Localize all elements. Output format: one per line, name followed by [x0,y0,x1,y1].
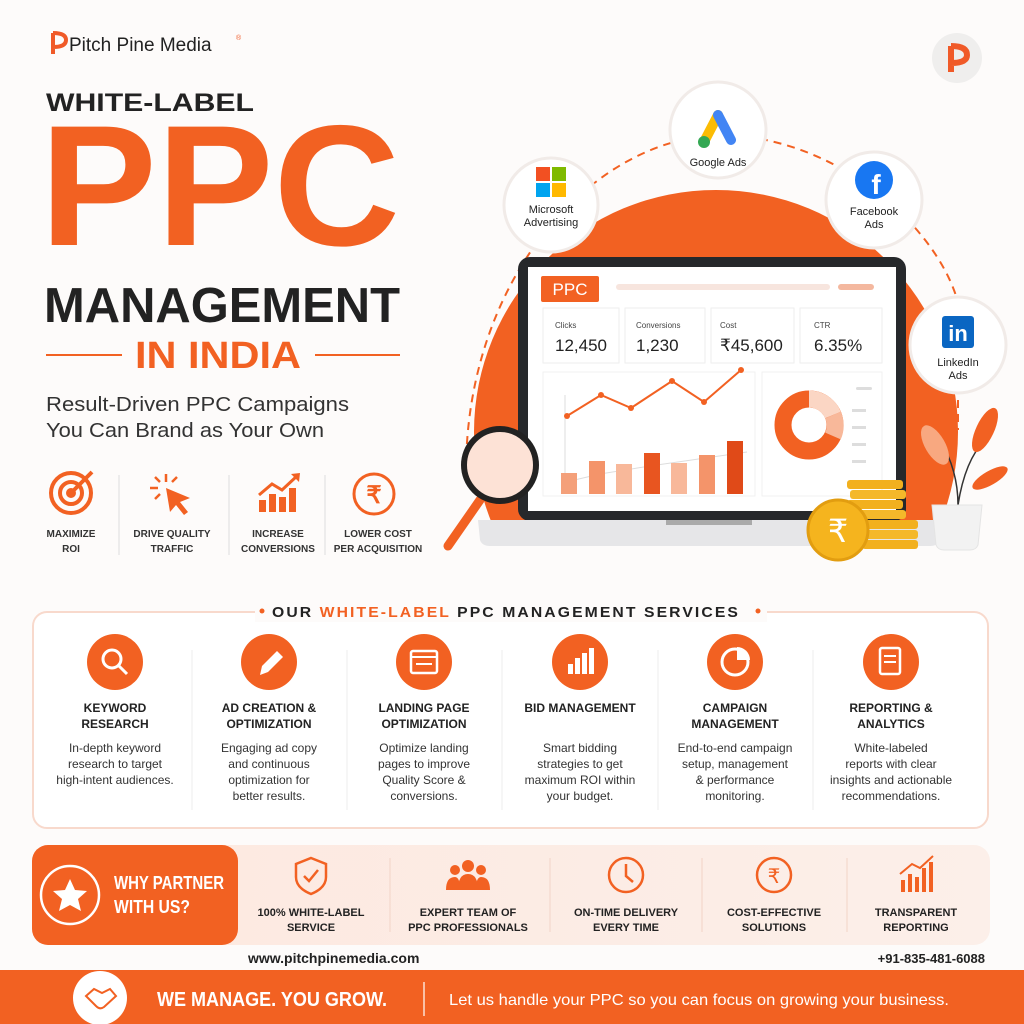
service: ad creation [221,634,317,803]
orange circle background [474,190,958,520]
benefit: transparent reporting: REPORTING [883,922,949,934]
benefits row: MAXIMIZE [47,529,96,540]
service: ad creation: better results. [233,789,305,803]
hero illustration [444,80,1008,562]
title: IN INDIA [135,335,301,377]
service: campaign management: & performance [696,773,775,787]
service: landing page: OPTIMIZATION [381,717,467,731]
benefits row: DRIVE QUALITY [133,529,211,540]
icon: rupee coins [808,480,918,560]
icon: rupee coins: ₹ [828,513,848,549]
icon: growth bars [259,473,300,512]
service: bid management: your budget. [547,789,613,803]
panel: why partner [32,845,990,945]
stat cards: Cost [720,321,737,330]
icon: Microsoft Advertising: Microsoft [529,204,573,216]
service: campaign management: End-to-end campaign [678,741,792,755]
service: reporting: White-labeled [854,741,928,755]
contact info: www.pitchpinemedia.com [247,950,419,966]
benefits row: PER ACQUISITION [334,544,422,555]
laptop: PPC [553,280,587,299]
service: bid management: Smart bidding [543,741,617,755]
footer bar: WE MANAGE. YOU GROW. [157,989,387,1011]
icon: Facebook Ads: Ads [865,219,884,231]
title: MANAGEMENT [44,279,400,333]
service: ad creation: OPTIMIZATION [226,717,312,731]
service: landing page: Quality Score & [382,773,466,787]
benefit: white-label service: 100% WHITE-LABEL [258,907,365,919]
benefit: white-label service [258,858,365,934]
benefit: transparent reporting: TRANSPARENT [875,907,957,919]
benefits row: TRAFFIC [151,544,193,555]
icon: Microsoft Advertising [504,158,598,252]
logo: ® [236,34,242,42]
benefit: expert team [408,860,528,934]
donut chart [762,372,882,496]
icon: top-right brand mark [932,33,982,83]
benefit: cost-effective [727,858,821,934]
service: reporting: REPORTING & [849,701,933,715]
icon: LinkedIn Ads: in [948,321,968,346]
service: ad creation: Engaging ad copy [221,741,317,755]
service: landing page: Optimize landing [379,741,469,755]
why partner badge [32,845,238,945]
service: landing page [378,634,470,803]
benefit: on-time: ON-TIME DELIVERY [574,907,679,919]
icon: magnifier [448,429,536,546]
icon: rupee: ₹ [366,482,382,509]
benefit: on-time [574,858,679,934]
service: campaign management: setup, management [682,757,789,771]
logo [53,33,242,56]
service: landing page: pages to improve [378,757,470,771]
benefit: cost-effective: COST-EFFECTIVE [727,907,821,919]
service: reporting: reports with clear [845,757,937,771]
service: ad creation: and continuous [228,757,310,771]
benefits row: CONVERSIONS [241,544,315,555]
icon: Facebook Ads [826,152,922,248]
benefits row [47,472,422,555]
icon: Microsoft Advertising: Advertising [524,217,578,229]
subtitle: You Can Brand as Your Own [46,420,324,442]
title: PPC [40,90,400,282]
service: landing page: conversions. [390,789,458,803]
service: ad creation: AD CREATION & [222,701,317,715]
stat cards [543,308,882,363]
service: keyword research: research to target [68,757,163,771]
dashed orbit [466,135,962,472]
stat cards: Conversions [636,321,680,330]
service: reporting: insights and actionable [830,773,952,787]
benefits row: LOWER COST [344,529,412,540]
benefit: transparent reporting [875,856,957,934]
benefit: cost-effective: SOLUTIONS [742,922,806,934]
stat cards: Clicks [555,321,576,330]
panel: services [33,600,988,828]
service: campaign management: CAMPAIGN [703,701,767,715]
service: keyword research: RESEARCH [81,717,149,731]
icon: Google Ads [670,82,766,178]
laptop: 1,230 [636,336,679,355]
service: keyword research [56,634,174,787]
laptop: 6.35% [814,336,862,355]
service: keyword research: high-intent audiences. [56,773,174,787]
service: keyword research: In-depth keyword [69,741,161,755]
icon: target [51,472,92,513]
contact info [247,950,985,966]
title [40,89,400,377]
service: landing page: LANDING PAGE [378,701,470,715]
benefit: white-label service: SERVICE [287,922,335,934]
benefit: expert team: EXPERT TEAM OF [420,907,517,919]
service: reporting: recommendations. [842,789,940,803]
benefit: expert team: PPC PROFESSIONALS [408,922,528,934]
service: bid management: maximum ROI within [525,773,635,787]
service: bid management: strategies to get [537,757,623,771]
why partner badge: WHY PARTNER [114,873,224,893]
benefits row: ROI [62,544,80,555]
icon: Facebook Ads: f [871,169,881,200]
benefit: on-time: EVERY TIME [593,922,659,934]
service: keyword research: KEYWORD [84,701,147,715]
service: bid management: BID MANAGEMENT [524,701,636,715]
icon: LinkedIn Ads: Ads [949,370,968,382]
service: reporting [830,634,952,803]
service: campaign management: MANAGEMENT [691,717,779,731]
contact info: +91-835-481-6088 [878,951,985,966]
icon: LinkedIn Ads: LinkedIn [937,357,979,369]
icon: cursor [150,474,190,515]
PPC badge [541,276,599,302]
title: WHITE-LABEL [46,89,254,117]
line and bar chart [543,367,755,496]
footer bar: Let us handle your PPC so you can focus on growing your business. [449,992,949,1009]
laptop: ₹45,600 [720,336,783,355]
stat cards: CTR [814,321,831,330]
logo: Pitch Pine Media [69,35,212,56]
why partner badge: WITH US? [114,897,190,917]
benefits row: INCREASE [252,529,304,540]
service: campaign management: monitoring. [705,789,765,803]
service: bid management [524,634,636,803]
subtitle [46,394,349,442]
icon: LinkedIn Ads [910,297,1006,393]
laptop: 12,450 [555,336,607,355]
laptop [478,257,945,546]
icon: plant [915,404,1011,550]
icon: Google Ads: Google Ads [690,157,747,169]
services heading: OUR WHITE-LABEL PPC MANAGEMENT SERVICES [272,604,740,621]
service: campaign management [678,634,792,803]
icon: rupee [354,474,394,514]
subtitle: Result-Driven PPC Campaigns [46,394,349,416]
service: ad creation: optimization for [228,773,310,787]
benefit: cost-effective: ₹ [768,866,780,888]
service: reporting: ANALYTICS [857,717,925,731]
footer bar [0,970,1024,1024]
icon: Facebook Ads: Facebook [850,206,899,218]
